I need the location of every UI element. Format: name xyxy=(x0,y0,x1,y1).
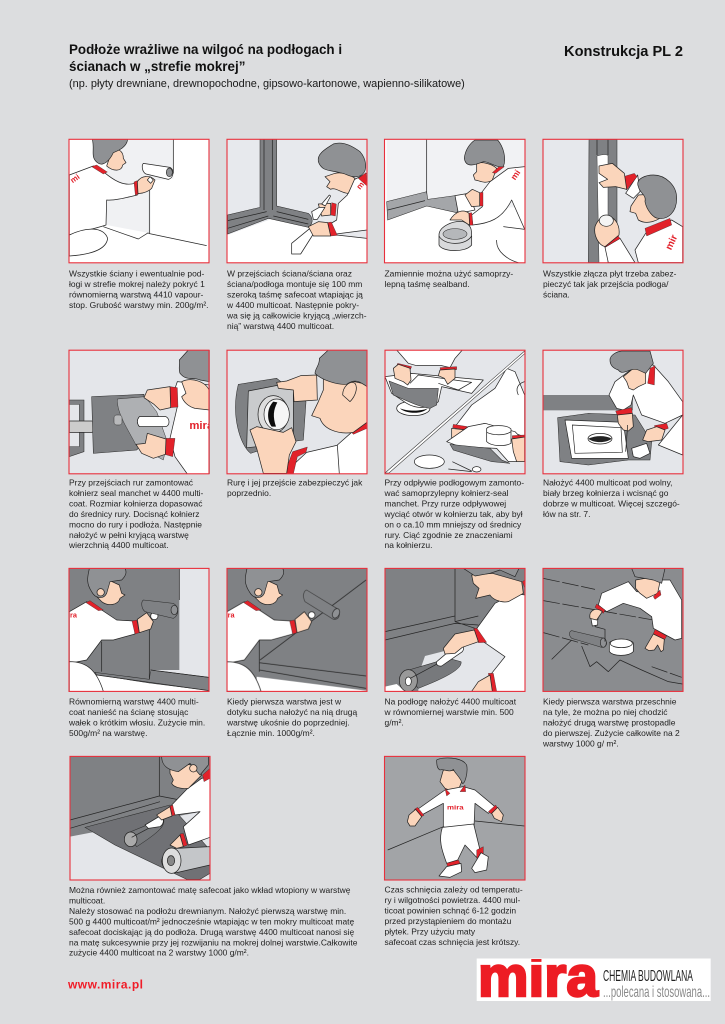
illustration: pressing the collar into multicoat xyxy=(543,350,683,474)
logo wordmark: mira xyxy=(478,945,599,1009)
illustration frame xyxy=(69,568,209,691)
website url: www.mira.pl xyxy=(67,978,143,992)
caption: Można również zamontować matę safecoat jako wkład wtopiony w warstwę xyxy=(69,885,351,895)
illustration frame xyxy=(543,139,683,263)
illustration frame xyxy=(384,139,525,263)
illustration: person standing on dried floor xyxy=(384,757,525,880)
illustration: collar around pipe close-up xyxy=(227,350,367,474)
caption: na tyle, że można po niej chodzić xyxy=(543,707,668,717)
caption: na kołnierzu. xyxy=(384,540,432,550)
caption: ściana/podłoga montuje się 100 mm xyxy=(227,279,362,289)
illustration: kneeling person rolling floor xyxy=(543,568,683,692)
caption: na matę sukcesywnie przy jej rozwijaniu na mokrej dolnej warstwie.Całkowite xyxy=(69,937,358,947)
illustration: rolling second coat diagonally: ra xyxy=(228,610,236,619)
logo background xyxy=(477,958,711,1001)
caption: Na podłogę nałożyć 4400 multicoat xyxy=(384,696,517,706)
caption: równomierną warstwą 4410 vapour- xyxy=(69,289,204,299)
caption: wać samoprzylepny kołnierz-seal xyxy=(384,488,509,498)
caption: do średnicy rury. Docisnąć kołnierz xyxy=(69,509,199,519)
caption: Kiedy pierwsza warstwa jest w xyxy=(227,696,342,706)
caption: wałek o krótkim włosiu. Zużycie min. xyxy=(68,717,205,727)
caption: Łącznie min. 1000g/m². xyxy=(227,728,315,738)
illustration frame xyxy=(70,756,210,880)
caption: ry i wilgotności powietrza. 4400 mul- xyxy=(384,895,520,905)
caption: W przejściach ściana/ściana oraz xyxy=(227,268,352,278)
panel: step 8 collar on floor xyxy=(543,350,683,519)
caption: on o ca.10 mm mniejszy od średnicy xyxy=(384,519,522,529)
caption: łogi w strefie mokrej należy pokryć 1 xyxy=(69,279,205,289)
illustration frame xyxy=(227,139,367,263)
caption: wierzchnią 4400 multicoat. xyxy=(68,540,169,550)
panel: step 1 wall priming xyxy=(69,139,209,310)
caption: 500g/m² na warstwę. xyxy=(69,728,147,738)
subtitle: (np. płyty drewniane, drewnopochodne, gipsowo-kartonowe, wapienno-silikatowe) xyxy=(69,78,465,90)
caption: łów na str. 7. xyxy=(543,509,590,519)
illustration: embedding tape in corner: m xyxy=(355,180,366,191)
title: Podłoże wrażliwe na wilgoć na podłogach i xyxy=(69,42,342,57)
caption: manchet. Przy rurze odpływowej xyxy=(384,498,506,508)
illustration frame xyxy=(543,350,683,474)
caption: nią” warstwą 4400 multicoat. xyxy=(227,321,334,331)
caption: kołnierz seal manchet w 4400 multi- xyxy=(69,488,204,498)
caption: Przy odpływie podłogowym zamonto- xyxy=(384,478,524,488)
caption: safecoat czas schnięcia jest krótszy. xyxy=(384,937,520,947)
caption: zużycie 4400 multicoat na 2 warstwy 1000 g/m². xyxy=(69,948,249,958)
panel: step 3 sealband tape xyxy=(384,139,525,289)
caption: do pierwszej. Zużycie całkowite na 2 xyxy=(543,728,680,738)
illustration: unrolling safecoat mat xyxy=(70,756,210,880)
caption: płytek. Przy użyciu maty xyxy=(384,926,476,936)
illustration: floor drain collar xyxy=(385,350,525,474)
caption: poprzednio. xyxy=(227,488,271,498)
panel: step 11 floor coat xyxy=(384,568,525,727)
panel: step 4 board joints xyxy=(543,139,683,299)
caption: ściana. xyxy=(543,289,570,299)
caption: Zamiennie można użyć samoprzy- xyxy=(384,268,513,278)
caption: Rurę i jej przejście zabezpieczyć jak xyxy=(227,478,363,488)
caption: Równomierną warstwę 4400 multi- xyxy=(69,696,199,706)
panel: step 5 pipe penetrations xyxy=(68,350,214,550)
caption: Czas schnięcia zależy od temperatu- xyxy=(384,885,523,895)
illustration frame xyxy=(69,350,209,474)
illustration: embedding tape in corner xyxy=(227,139,367,263)
caption: g/m². xyxy=(384,717,404,727)
caption: biały brzeg kołnierza i wcisnąć go xyxy=(543,488,669,498)
illustration: rolling first coat on wall: ra xyxy=(70,610,78,619)
caption: nałożyć drugą warstwę prostopadle xyxy=(543,717,676,727)
panel: step 13 safecoat mat xyxy=(69,756,358,958)
construction code heading: Konstrukcja PL 2 xyxy=(564,44,683,60)
caption: szeroką taśmę safecoat wtapiając ją xyxy=(227,289,363,299)
caption: Nałożyć 4400 multicoat pod wolny, xyxy=(543,478,673,488)
caption: coat. Rozmiar kołnierza dopasować xyxy=(69,498,202,508)
panel: step 10 second coat on wall xyxy=(226,568,367,738)
panel: step 2 tape on corners xyxy=(226,139,367,331)
caption: przed przystąpieniem do montażu xyxy=(384,916,512,926)
caption: safecoat dociskając ją do podłoża. Drugą warstwę 4400 multicoat nanosi się xyxy=(69,927,355,937)
illustration: person rolling wall xyxy=(69,139,209,263)
caption: 500 g 4400 multicoat/m² jednocześnie wtapiając w ten mokry multicoat matę xyxy=(69,916,354,926)
title: ścianach w „strefie mokrej” xyxy=(69,59,245,74)
caption: ticoat powinien schnąć 6-12 godzin xyxy=(384,906,516,916)
caption: multicoat. xyxy=(69,895,105,905)
illustration frame xyxy=(227,350,367,474)
caption: rury. Ciąć zgodnie ze znaczeniami xyxy=(384,530,513,540)
caption: Wszystkie złącza płyt trzeba zabez- xyxy=(543,268,677,278)
caption: lepną taśmę sealband. xyxy=(384,279,470,289)
caption: stop. Grubość warstwy min. 200g/m². xyxy=(69,300,209,310)
illustration: taping a vertical joint xyxy=(543,139,683,263)
panel: step 6 pipe close-up xyxy=(227,350,367,498)
illustration: rolling multicoat on floor xyxy=(385,568,525,692)
caption: Kiedy pierwsza warstwa przeschnie xyxy=(543,696,677,706)
caption: w 4400 multicoat. Następnie pokry- xyxy=(226,300,359,310)
caption: nałożyć w pełni kryjącą warstwę xyxy=(69,530,189,540)
illustration frame xyxy=(384,756,525,880)
panel: step 14 drying time xyxy=(384,756,525,947)
caption: dobrze w multicoat. Więcej szczegó- xyxy=(543,498,680,508)
caption: Należy stosować na podłożu drewnianym. Nałożyć pierwszą warstwę min. xyxy=(69,906,346,916)
illustration frame xyxy=(385,350,525,474)
panel: step 7 floor drain xyxy=(384,350,525,550)
illustration: taping a vertical joint: mir xyxy=(664,233,680,252)
panel: step 12 perpendicular second coat xyxy=(542,568,683,748)
caption: wyciąć otwór w kołnierzu tak, aby był xyxy=(384,509,523,519)
logo: mira chemia budowlana xyxy=(477,945,711,1009)
illustration frame xyxy=(69,139,209,263)
illustration: fitting a seal collar over a pipe: mira xyxy=(189,420,214,432)
caption: warstwę ukośnie do poprzedniej. xyxy=(226,717,350,727)
caption: dotyku sucha nałożyć na nią drugą xyxy=(227,707,357,717)
caption: Przy przejściach rur zamontować xyxy=(69,478,193,488)
illustration: self-adhesive tape roll xyxy=(384,139,525,263)
illustration: rolling first coat on wall xyxy=(69,568,210,692)
caption: pieczyć tak jak przejścia podłoga/ xyxy=(543,279,669,289)
illustration: person rolling wall: mi xyxy=(69,172,81,185)
caption: mocno do rury i podłoża. Następnie xyxy=(69,519,202,529)
illustration frame xyxy=(543,568,683,691)
caption: wa się ją całkowicie kryjącą „wierzch- xyxy=(226,310,367,320)
illustration: person standing on dried floor: mira xyxy=(447,804,464,811)
caption: coat nanieść na ścianę stosując xyxy=(69,707,188,717)
caption: Wszystkie ściany i ewentualnie pod- xyxy=(69,268,204,278)
illustration: fitting a seal collar over a pipe xyxy=(69,350,214,474)
illustration: rolling second coat diagonally xyxy=(227,568,367,692)
illustration frame xyxy=(227,568,367,691)
illustration frame xyxy=(385,568,525,691)
illustration: self-adhesive tape roll: mi xyxy=(508,168,522,182)
caption: w równomiernej warstwie min. 500 xyxy=(384,707,514,717)
panel: step 9 first coat on wall xyxy=(68,568,210,738)
caption: warstwy 1000 g/ m². xyxy=(542,738,619,748)
